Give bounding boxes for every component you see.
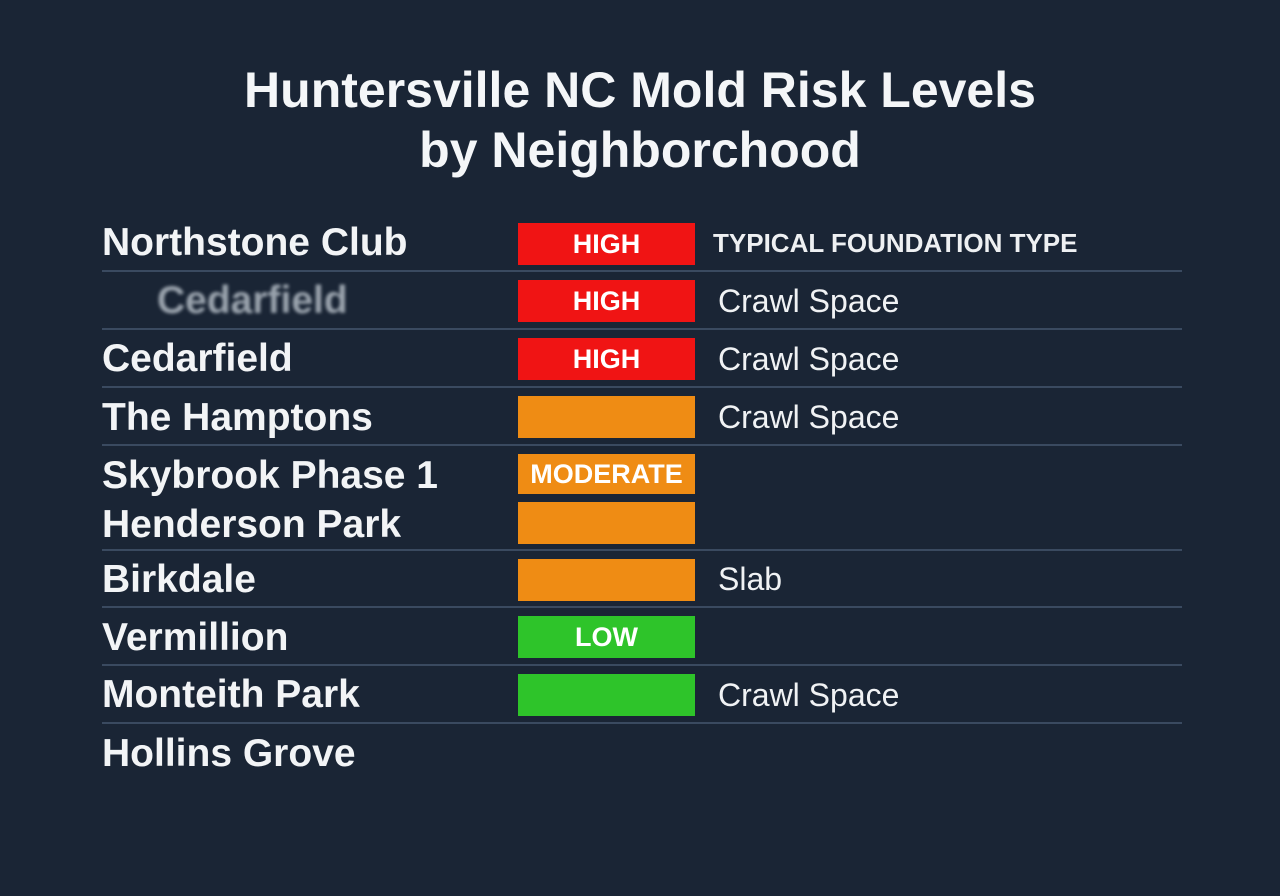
foundation: Crawl Space: Crawl Space bbox=[718, 677, 899, 713]
bar: HIGH: HIGH bbox=[573, 344, 640, 374]
bar: MODERATE bbox=[518, 454, 695, 494]
title: Huntersville NC Mold Risk Levels bbox=[244, 62, 1036, 118]
bar: moderate bbox=[518, 396, 695, 438]
foundation: Crawl Space: Crawl Space bbox=[718, 399, 899, 435]
row: Vermillion: Vermillion bbox=[102, 616, 288, 659]
foundation: Crawl Space: Crawl Space bbox=[718, 283, 899, 319]
row: Henderson Park: Henderson Park bbox=[102, 503, 401, 546]
bar: HIGH: HIGH bbox=[573, 286, 640, 316]
row: Skybrook Phase 1: Skybrook Phase 1 bbox=[102, 454, 438, 497]
row: Cedarfield: Cedarfield bbox=[102, 337, 293, 380]
bar: moderate bbox=[518, 502, 695, 544]
foundation: Crawl Space: Crawl Space bbox=[718, 341, 899, 377]
title bbox=[244, 62, 1036, 178]
row: Northstone Club: Northstone Club bbox=[102, 221, 407, 264]
bar: HIGH: HIGH bbox=[573, 229, 640, 259]
row: Birkdale: Birkdale bbox=[102, 558, 256, 601]
row: The Hamptons: The Hamptons bbox=[102, 396, 373, 439]
column header: typical foundation type: TYPICAL FOUNDATION TYPE bbox=[713, 228, 1078, 258]
row: Monteith Park: Monteith Park bbox=[102, 673, 360, 716]
bar: MODERATE: MODERATE bbox=[530, 459, 683, 489]
bar: LOW bbox=[518, 616, 695, 658]
bar: HIGH bbox=[518, 280, 695, 322]
bar: moderate bbox=[518, 559, 695, 601]
foundation: Slab: Slab bbox=[718, 561, 782, 597]
title: by Neighborchood bbox=[419, 122, 861, 178]
row: Hollins Grove: Hollins Grove bbox=[102, 732, 356, 775]
bar: HIGH bbox=[518, 338, 695, 380]
bar: low bbox=[518, 674, 695, 716]
row: Cedarfield (blurred): Cedarfield bbox=[157, 279, 348, 322]
bar: HIGH bbox=[518, 223, 695, 265]
bar: LOW: LOW bbox=[575, 622, 638, 652]
